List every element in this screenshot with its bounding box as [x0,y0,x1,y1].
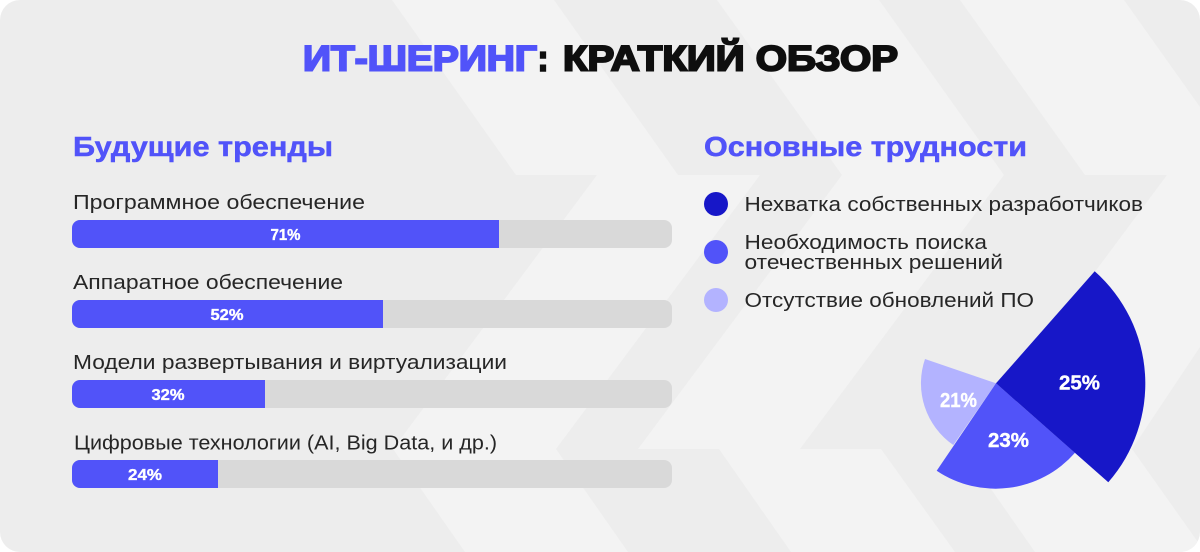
bar row: digital technologies 24%: 24% [128,467,162,484]
legend item: domestic solutions: Необходимость поиска [744,232,988,254]
title: : [538,40,548,78]
bar row: hardware 52%: 52% [210,307,244,324]
heading: main difficulties: Основные трудности [704,131,1027,162]
panel: main difficulties [704,131,1145,489]
pie chart [921,271,1145,489]
bar row: software 71%: Программное обеспечение [73,192,365,214]
sector: 21% [921,359,996,445]
bar row: deployment models 32%: Модели развертывания и виртуализации [73,352,507,374]
bar row: digital technologies 24% [72,432,672,488]
heading: future trends: Будущие тренды [73,131,333,162]
bar row: deployment models 32%: 32% [152,387,185,404]
legend item: domestic solutions [704,232,1003,274]
title [303,38,898,78]
legend item: domestic solutions: отечественных решений [744,252,1003,274]
bar row: hardware 52%: Аппаратное обеспечение [73,272,343,294]
sector: 25% [996,271,1145,482]
value: 23%: 23% [988,429,1029,452]
sector: 23% [937,383,1075,489]
panel: future trends [72,131,672,488]
bar row: software 71%: 71% [270,227,301,244]
legend [704,192,1143,312]
bar row: hardware 52% [72,272,672,328]
value: 21%: 21% [940,389,977,412]
legend item: lack of developers: Нехватка собственных разработчиков [744,194,1143,216]
title: ИТ-ШЕРИНГ [303,40,537,78]
title: КРАТКИЙ ОБЗОР [563,38,898,78]
bar row: software 71% [72,192,672,248]
legend item: no software updates: Отсутствие обновлений ПО [744,290,1034,312]
bar row: deployment models 32% [72,352,672,408]
value: 25%: 25% [1059,372,1100,394]
bar row: digital technologies 24%: Цифровые технологии (AI, Big Data, и др.) [74,432,497,454]
